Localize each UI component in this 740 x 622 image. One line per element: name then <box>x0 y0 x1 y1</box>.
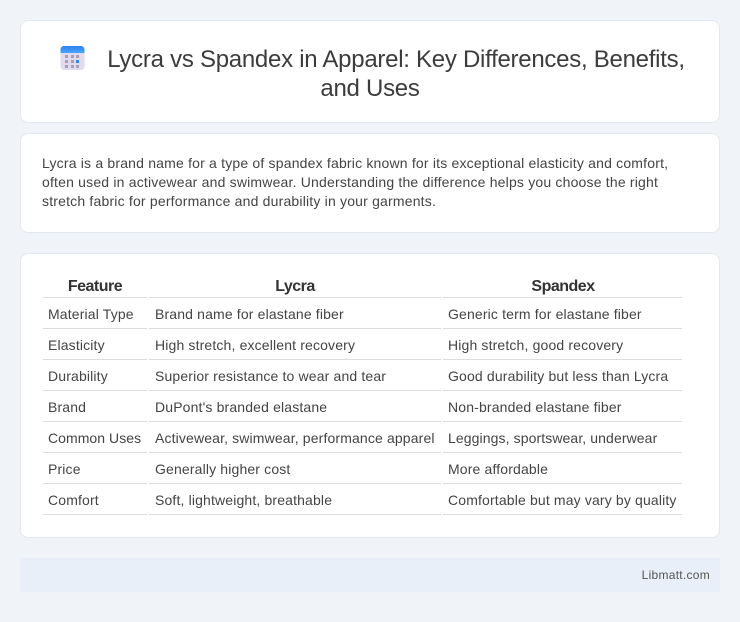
row: Price: Generally higher cost <box>155 461 290 477</box>
table header <box>68 278 595 295</box>
row: Material Type: Material Type <box>48 306 134 322</box>
row: Material Type <box>48 306 642 322</box>
footer text: Libmatt.com <box>642 568 710 582</box>
row: Comfort: Soft, lightweight, breathable <box>155 492 332 508</box>
row: Durability <box>48 368 668 384</box>
text block: introduction: stretch fabric for performance and durability in your garments. <box>42 193 436 209</box>
footer bar <box>20 558 720 592</box>
row: Common Uses: Leggings, sportswear, underwear <box>448 430 657 446</box>
row: Elasticity: High stretch, good recovery <box>448 337 623 353</box>
row: Price: Price <box>48 461 81 477</box>
title: Lycra vs Spandex in Apparel: Key Differences, Benefits, <box>107 46 685 73</box>
icon: calendar <box>60 46 84 70</box>
row: Elasticity <box>48 337 624 353</box>
row: Common Uses <box>48 430 658 446</box>
row: Brand <box>48 399 622 415</box>
row: Comfort: Comfortable but may vary by quality <box>448 492 677 508</box>
row: Elasticity: High stretch, excellent recovery <box>155 337 355 353</box>
row: Price: More affordable <box>448 461 548 477</box>
row: Common Uses: Common Uses <box>48 430 141 446</box>
text block: introduction <box>42 155 668 209</box>
row: Durability: Good durability but less than Lycra <box>448 368 668 384</box>
row: Durability: Durability <box>48 368 108 384</box>
row: Common Uses: Activewear, swimwear, performance apparel <box>155 430 435 446</box>
row: Material Type: Generic term for elastane fiber <box>448 306 642 322</box>
row: Comfort: Comfort <box>48 492 99 508</box>
table header: Lycra <box>275 278 315 295</box>
row: Elasticity: Elasticity <box>48 337 105 353</box>
row: Material Type: Brand name for elastane fiber <box>155 306 344 322</box>
row: Brand: Non-branded elastane fiber <box>448 399 622 415</box>
title: and Uses <box>320 75 420 102</box>
row: Brand: DuPont's branded elastane <box>155 399 327 415</box>
row: Price <box>48 461 548 477</box>
text block: introduction: Lycra is a brand name for a type of spandex fabric known for its exceptional elasticity and comfort, <box>42 155 668 171</box>
title <box>107 46 685 102</box>
panel: introduction <box>20 133 720 233</box>
text block: introduction: often used in activewear and swimwear. Understanding the difference helps you choose the right <box>42 174 658 190</box>
panel: title card <box>20 20 720 123</box>
row: Durability: Superior resistance to wear and tear <box>155 368 386 384</box>
row: Brand: Brand <box>48 399 86 415</box>
panel: comparison table <box>20 253 720 538</box>
row: Comfort <box>48 492 677 508</box>
table header: Spandex <box>531 278 595 295</box>
table header: Feature <box>68 278 122 295</box>
